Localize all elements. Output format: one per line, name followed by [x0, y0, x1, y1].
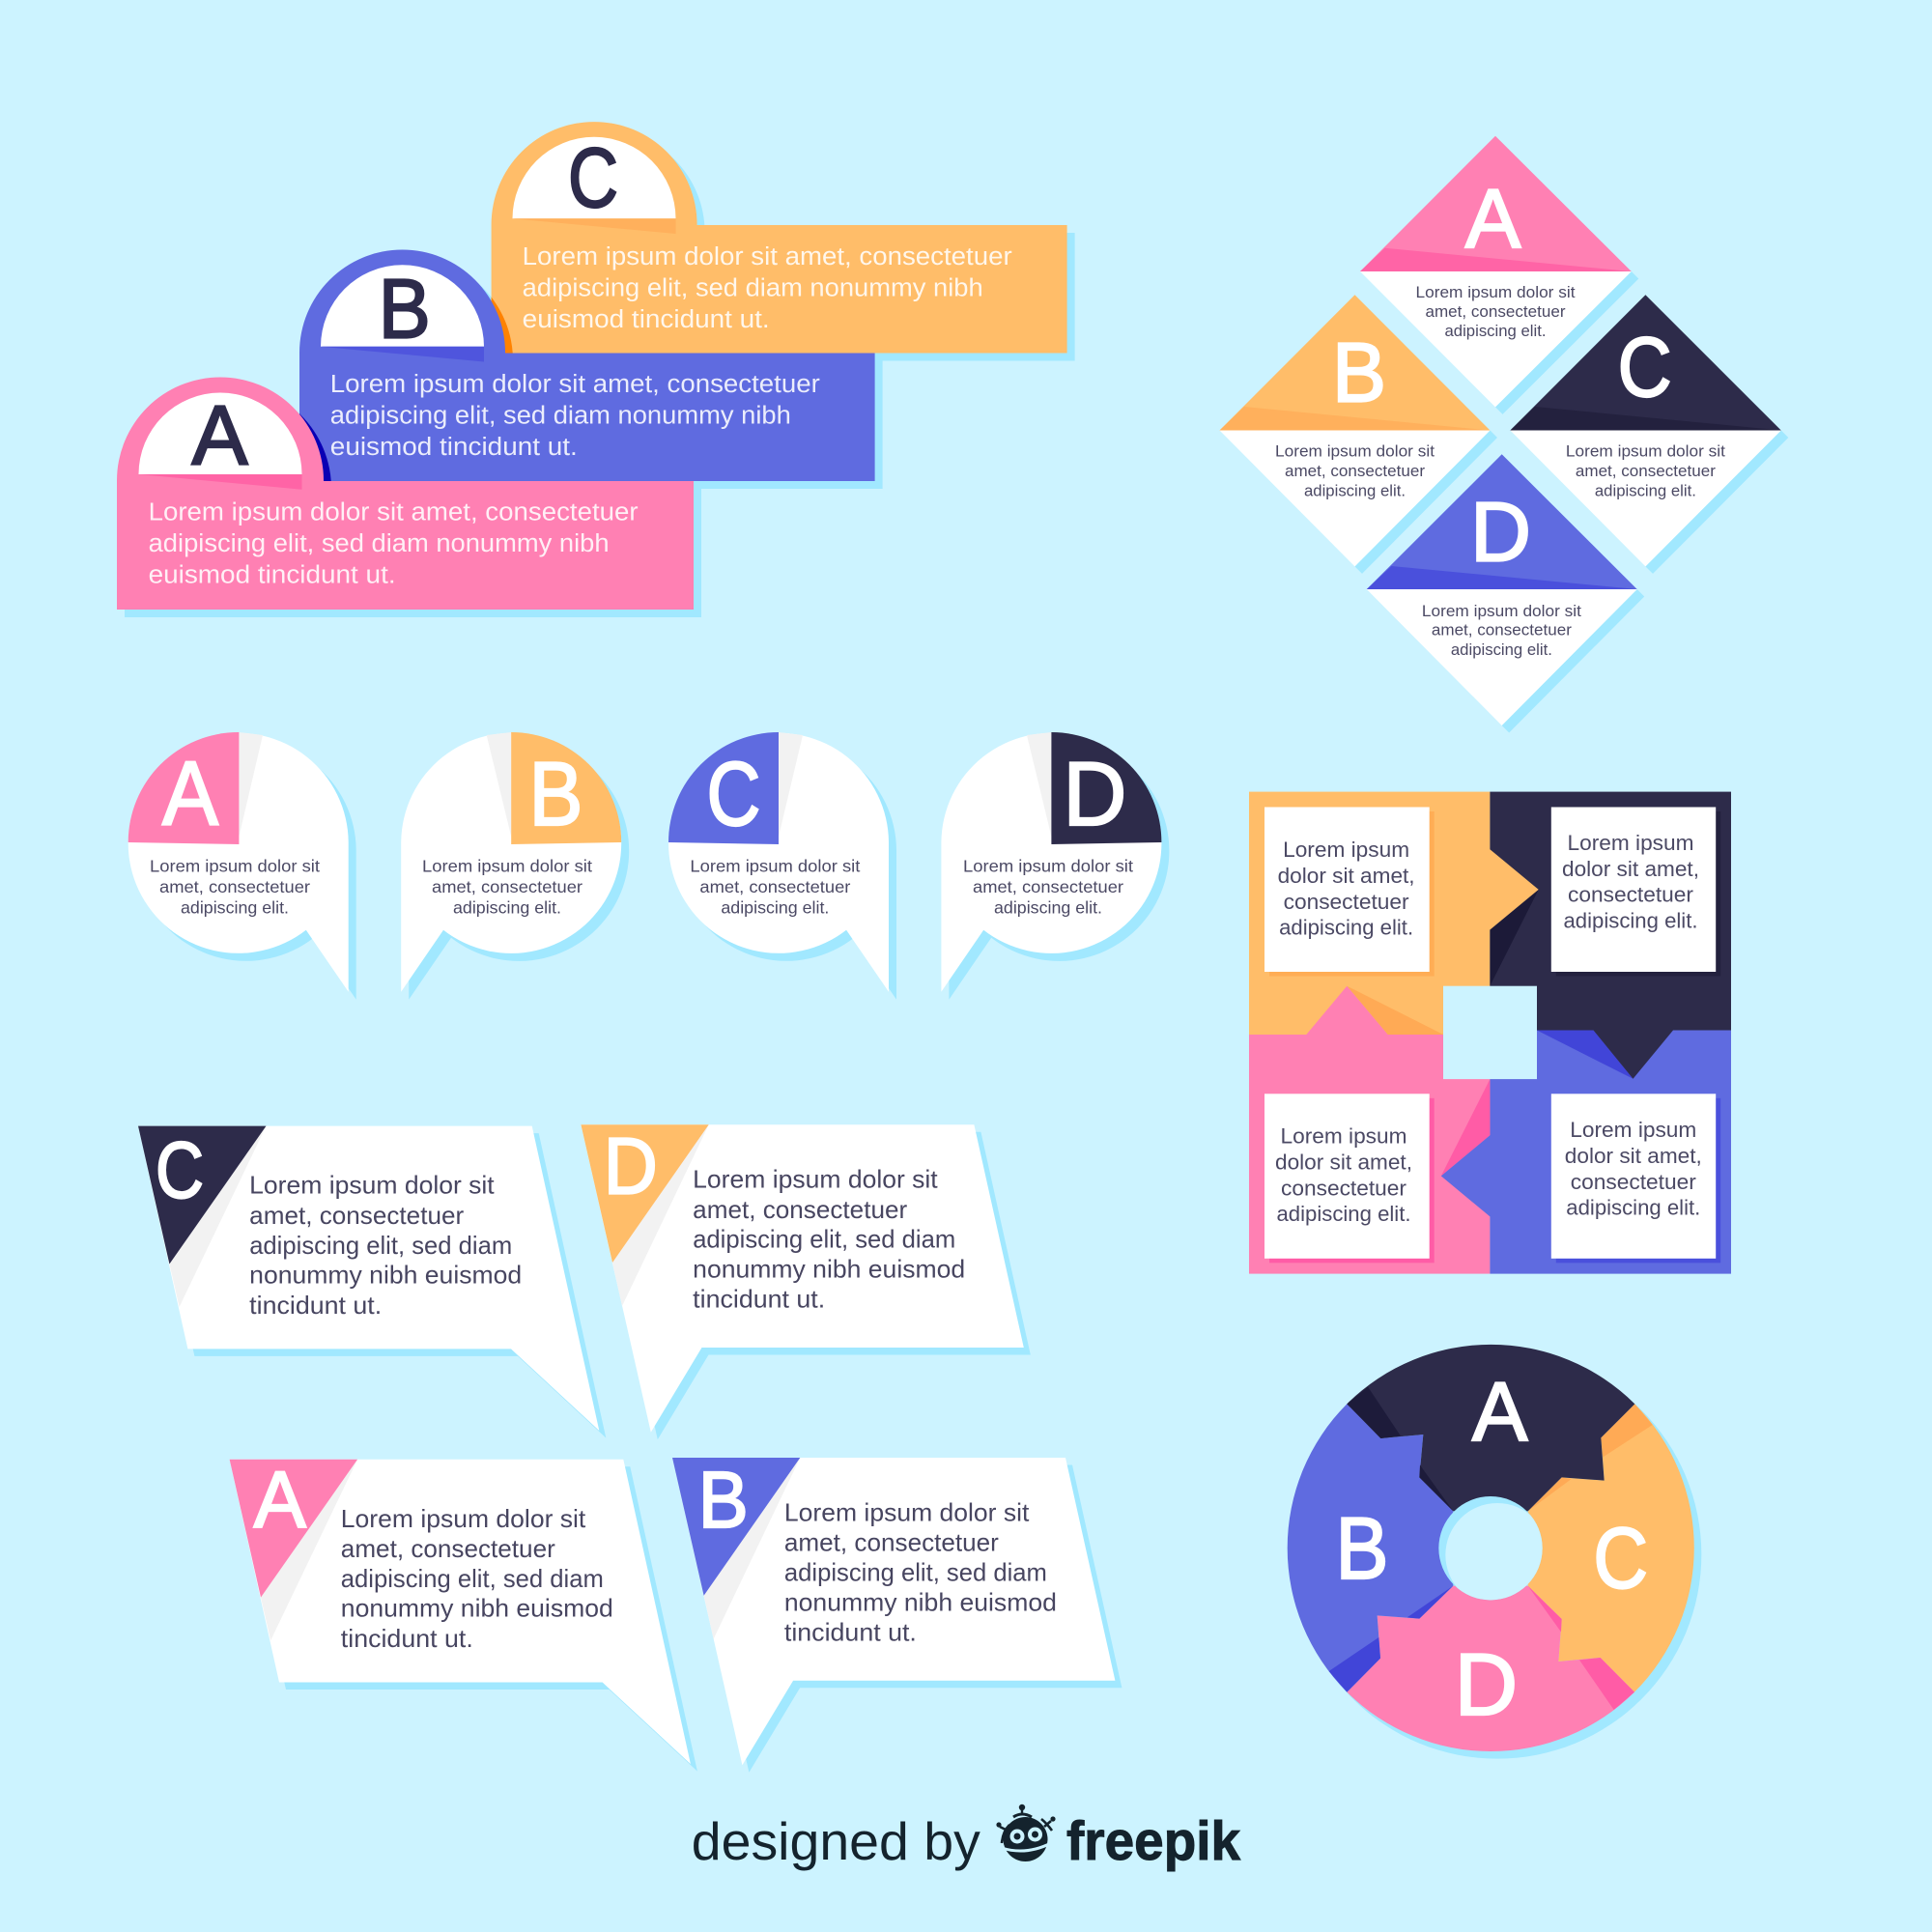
panel: four-colour square: [1249, 792, 1731, 1274]
card A: euismod tincidunt ut.: [149, 562, 396, 589]
bubble A: A: [254, 1455, 306, 1544]
diamond C: C: [1618, 321, 1672, 414]
bubble C: C: [156, 1124, 204, 1215]
center square: [1443, 986, 1537, 1079]
bubble C: [138, 1124, 606, 1437]
bubble A: A: [162, 742, 218, 844]
card A: adipiscing elit, sed diam nonummy nibh: [149, 530, 610, 557]
diamond C: Lorem ipsum dolor sit: [1566, 443, 1725, 461]
panel: stacked arch cards: [117, 122, 1075, 617]
diamond C: [1510, 295, 1788, 574]
card B: B: [379, 263, 431, 355]
panel: round speech bubbles: [128, 732, 1169, 1000]
card B: euismod tincidunt ut.: [330, 434, 578, 461]
bubble C: Lorem ipsum dolor sit: [690, 856, 861, 875]
bubble C: tincidunt ut.: [249, 1291, 382, 1320]
bubble A: [230, 1455, 697, 1772]
bubble A: [128, 732, 356, 1000]
segment D pink: [1347, 1586, 1634, 1751]
bubble C: C: [707, 743, 761, 844]
bubble D: adipiscing elit.: [994, 898, 1102, 918]
bubble D: nonummy nibh euismod: [693, 1254, 965, 1283]
text card top right: adipiscing elit.: [1563, 908, 1698, 933]
card B: [299, 249, 875, 481]
diamond A: amet, consectetuer: [1426, 303, 1566, 321]
bubble D: D: [1063, 743, 1126, 844]
bubble C: [668, 732, 896, 1000]
footer credit: designed by: [692, 1811, 980, 1871]
bubble D: Lorem ipsum dolor sit: [963, 856, 1133, 875]
segment B blue: [1288, 1404, 1453, 1692]
bubble D: D: [604, 1121, 658, 1211]
bubble B: [672, 1455, 1122, 1773]
bubble B: amet, consectetuer: [784, 1528, 999, 1557]
text card bottom right: adipiscing elit.: [1566, 1196, 1700, 1220]
text card bottom right: consectetuer: [1571, 1170, 1696, 1194]
bubble A: adipiscing elit.: [181, 898, 289, 918]
center hole: [1438, 1496, 1543, 1600]
segment A navy: A: [1472, 1366, 1528, 1459]
text card bottom left: adipiscing elit.: [1277, 1202, 1410, 1226]
card A: A: [191, 388, 248, 483]
diamond A: Lorem ipsum dolor sit: [1416, 284, 1576, 301]
bubble B: adipiscing elit, sed diam: [784, 1557, 1047, 1586]
bubble D: adipiscing elit, sed diam: [693, 1225, 955, 1254]
diamond A: [1360, 136, 1638, 414]
bubble B: adipiscing elit.: [453, 898, 561, 918]
footer credit: [692, 1804, 1240, 1872]
bubble D: tincidunt ut.: [693, 1285, 825, 1314]
diamond D: adipiscing elit.: [1451, 641, 1552, 659]
card B: adipiscing elit, sed diam nonummy nibh: [330, 403, 791, 430]
diamond B: Lorem ipsum dolor sit: [1275, 443, 1435, 461]
bubble A: nonummy nibh euismod: [341, 1594, 613, 1623]
panel: circular puzzle: [1288, 1345, 1701, 1759]
diamond B: adipiscing elit.: [1304, 483, 1406, 500]
arrow folds: [1347, 890, 1633, 1176]
bubble D: amet, consectetuer: [973, 877, 1123, 896]
bubble C: nonummy nibh euismod: [249, 1261, 522, 1290]
segment C orange: C: [1593, 1509, 1648, 1605]
bubble D: Lorem ipsum dolor sit: [693, 1165, 938, 1194]
text card top right: consectetuer: [1568, 883, 1693, 907]
panel: diamond cards: [1219, 136, 1788, 732]
card A: Lorem ipsum dolor sit amet, consectetuer: [149, 498, 639, 526]
bubble A: amet, consectetuer: [159, 877, 310, 896]
bubble B: amet, consectetuer: [432, 877, 582, 896]
bubble D: amet, consectetuer: [693, 1195, 908, 1224]
text card top left: [1264, 808, 1435, 976]
text card top left: Lorem ipsum: [1283, 838, 1409, 862]
card shadows: [125, 129, 1075, 617]
bubble C: adipiscing elit, sed diam: [249, 1231, 512, 1260]
card A: [117, 378, 694, 610]
text card top right: [1551, 808, 1720, 976]
bubble D: [941, 732, 1169, 1000]
diamond B: amet, consectetuer: [1285, 463, 1426, 480]
segment C orange: [1528, 1404, 1694, 1692]
bubble B: nonummy nibh euismod: [784, 1587, 1057, 1616]
bubble C: adipiscing elit.: [721, 898, 829, 918]
icon: freepik mascot: [996, 1804, 1056, 1861]
arrow: blue left: [1441, 1135, 1492, 1216]
bubble A: tincidunt ut.: [341, 1624, 473, 1653]
text card bottom right: dolor sit amet,: [1565, 1144, 1702, 1168]
card C: adipiscing elit, sed diam nonummy nibh: [523, 274, 983, 301]
diamond B: B: [1332, 327, 1386, 419]
text card bottom left: [1264, 1094, 1435, 1263]
bubble A: Lorem ipsum dolor sit: [150, 856, 320, 875]
text card top right: Lorem ipsum: [1567, 831, 1694, 855]
bubble A: amet, consectetuer: [341, 1534, 555, 1563]
diamond D: D: [1470, 485, 1531, 580]
text card top left: dolor sit amet,: [1278, 864, 1415, 888]
text card top left: adipiscing elit.: [1279, 916, 1413, 940]
bubble C: amet, consectetuer: [249, 1201, 465, 1230]
diamond D: [1367, 454, 1644, 732]
arrow: pink up: [1306, 986, 1388, 1037]
text card bottom left: dolor sit amet,: [1275, 1150, 1412, 1175]
diamond C: adipiscing elit.: [1595, 483, 1696, 500]
text card bottom left: Lorem ipsum: [1281, 1124, 1406, 1149]
bubble A: adipiscing elit, sed diam: [341, 1564, 604, 1593]
bubble B: tincidunt ut.: [784, 1617, 917, 1646]
segment D pink: D: [1455, 1636, 1518, 1734]
blue fold sliver: [299, 413, 331, 481]
text card top left: consectetuer: [1284, 890, 1409, 914]
card C: euismod tincidunt ut.: [523, 306, 770, 333]
bubble B: B: [529, 743, 583, 844]
arrow: navy down: [1594, 1028, 1673, 1079]
diamond A: A: [1465, 173, 1521, 266]
card C: C: [568, 131, 618, 225]
segment B blue: B: [1335, 1500, 1388, 1598]
bubble B: B: [698, 1455, 749, 1545]
bubble D: [581, 1121, 1031, 1439]
card B: Lorem ipsum dolor sit amet, consectetuer: [330, 371, 820, 398]
bubble B: [401, 732, 629, 1000]
panel: angular speech bubbles: [138, 1121, 1122, 1773]
diamond B: [1219, 295, 1497, 574]
segment A navy: [1347, 1345, 1634, 1511]
diamond C: amet, consectetuer: [1576, 463, 1716, 480]
arrow: orange right: [1488, 849, 1539, 929]
card C: [492, 122, 1067, 354]
footer credit: freepik: [1066, 1810, 1240, 1872]
diamond D: Lorem ipsum dolor sit: [1422, 603, 1581, 620]
text card bottom left: consectetuer: [1281, 1176, 1406, 1200]
orange fold sliver: [491, 298, 513, 354]
bubble B: Lorem ipsum dolor sit: [422, 856, 592, 875]
text card bottom right: [1551, 1094, 1720, 1263]
bubble C: amet, consectetuer: [699, 877, 851, 896]
bubble A: Lorem ipsum dolor sit: [341, 1504, 586, 1533]
card C: Lorem ipsum dolor sit amet, consectetuer: [523, 243, 1012, 270]
bubble B: Lorem ipsum dolor sit: [784, 1497, 1030, 1526]
text card bottom right: Lorem ipsum: [1570, 1118, 1696, 1142]
diamond D: amet, consectetuer: [1432, 622, 1572, 639]
bubble C: Lorem ipsum dolor sit: [249, 1171, 495, 1200]
diamond A: adipiscing elit.: [1445, 323, 1546, 340]
text card top right: dolor sit amet,: [1562, 857, 1699, 881]
